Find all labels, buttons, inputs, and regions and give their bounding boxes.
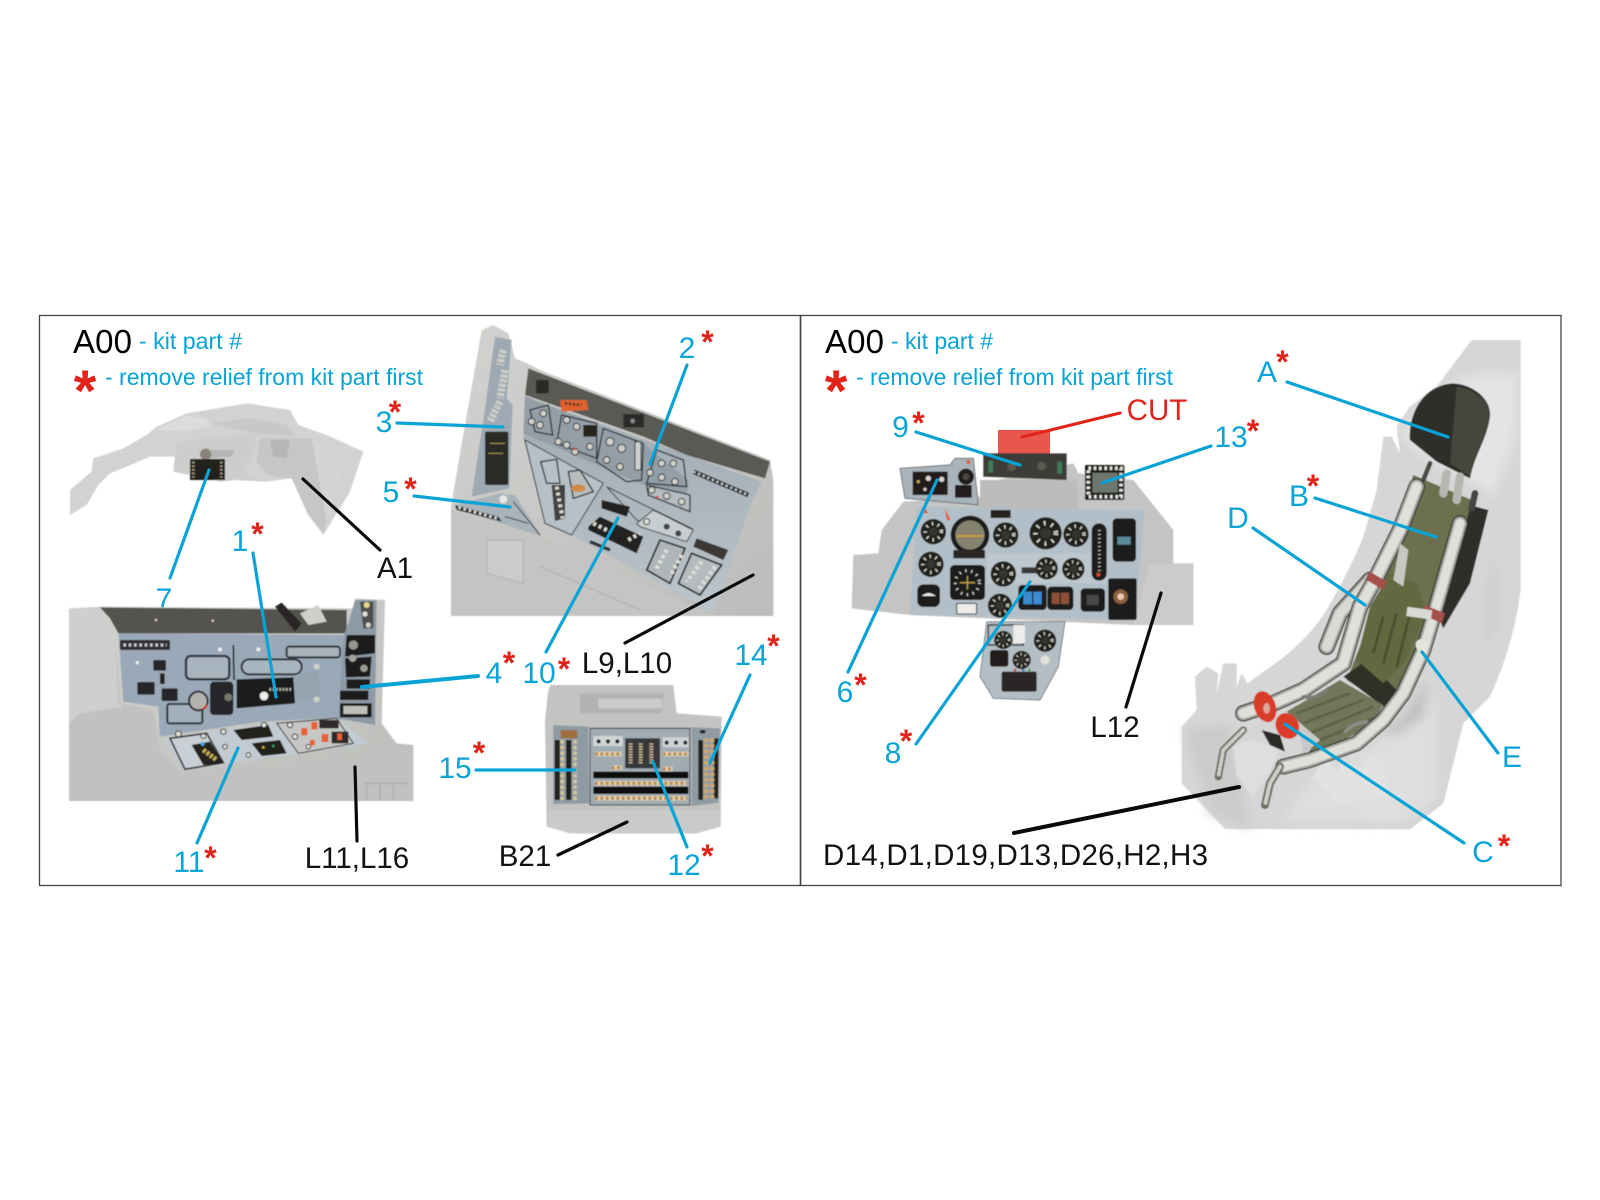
callout 5: 5 <box>383 476 399 509</box>
callout 11: 11 <box>173 846 205 879</box>
attitude indicator <box>951 516 989 554</box>
callout C <box>1285 724 1511 869</box>
callout 9: 9 <box>892 411 909 444</box>
heading: legend right: - remove relief from kit part first <box>856 364 1174 390</box>
heading: legend right: - kit part # <box>891 328 993 354</box>
callout 15: 15 <box>438 752 472 785</box>
photo: canopy frame part A1 <box>70 403 363 535</box>
callout D: D <box>1227 502 1249 535</box>
callout 9: * <box>912 405 925 441</box>
callout 12: * <box>701 838 714 874</box>
centre panel <box>553 725 589 804</box>
heading: legend left: - kit part # <box>139 328 242 354</box>
callout L12: L12 <box>1090 711 1140 744</box>
callout E: E <box>1502 741 1522 774</box>
heading: legend right <box>825 323 1174 424</box>
callout 10: 10 <box>522 657 556 690</box>
side panel <box>472 337 513 497</box>
frame: right panel <box>800 316 1561 886</box>
callout 2: * <box>701 324 714 360</box>
callout 15: * <box>473 735 486 771</box>
seat cushion <box>1287 680 1383 760</box>
line: panel divider <box>800 315 802 885</box>
panel: right <box>800 316 1561 886</box>
lower slanted panel <box>163 718 368 770</box>
callout C: * <box>1498 828 1511 864</box>
callout L12 <box>1090 593 1161 744</box>
harness <box>1218 463 1475 805</box>
callout B21 <box>499 822 627 873</box>
heading: legend right: * <box>825 359 848 424</box>
photo: ejection seat <box>1182 340 1521 829</box>
callout L11,L16: L11,L16 <box>305 842 409 875</box>
heading: legend right: A00 <box>825 323 884 360</box>
callout B: * <box>1307 468 1320 504</box>
callout 4 <box>362 645 516 690</box>
top left plate <box>900 458 978 505</box>
callout 11: * <box>204 840 217 876</box>
square gauge <box>950 565 985 600</box>
label: 7 behind console photo <box>156 470 209 616</box>
photo: instrument panel L12 <box>852 453 1193 700</box>
callout D14 group <box>823 787 1239 872</box>
callout 14: * <box>767 628 780 664</box>
callout 3: * <box>389 394 402 430</box>
callouts: left panel <box>173 324 780 882</box>
heading: legend left: A00 <box>73 323 132 360</box>
right panel <box>338 600 377 725</box>
callout 2 <box>650 324 714 464</box>
callout 15 <box>438 735 575 785</box>
panel: left <box>40 315 800 886</box>
callout 6: 6 <box>837 676 853 709</box>
callout 1 <box>232 516 276 697</box>
callout 6: * <box>854 667 867 703</box>
callout 13 <box>1102 413 1260 483</box>
callout 2: 2 <box>679 332 695 365</box>
lower panels <box>525 440 603 535</box>
callout 3 <box>376 394 503 439</box>
octagon gauge <box>917 584 940 607</box>
callout A <box>1257 344 1448 437</box>
seat back <box>1430 503 1488 628</box>
photo: console L11,L16 <box>69 598 413 801</box>
soft shading <box>1183 373 1517 829</box>
callout 8: * <box>900 723 913 759</box>
callout D <box>1227 502 1365 605</box>
photo: radio console B21 <box>545 685 722 833</box>
callout D14 group: D14,D1,D19,D13,D26,H2,H3 <box>823 839 1208 872</box>
callout B <box>1289 468 1436 537</box>
callout CUT: CUT <box>1127 394 1187 427</box>
callout B: B <box>1289 480 1309 513</box>
callout 10: * <box>558 651 571 687</box>
callout 12 <box>653 762 714 882</box>
callout L9,L10: L9,L10 <box>582 647 672 680</box>
main panel <box>523 397 762 613</box>
lower plate <box>980 622 1065 700</box>
callout L9,L10 <box>582 575 753 680</box>
sub panels <box>530 405 690 512</box>
tall gauge <box>1092 523 1107 581</box>
callout 1: 1 <box>232 525 248 558</box>
callout 8 <box>885 582 1030 770</box>
callout 5 <box>383 471 510 509</box>
callout 8: 8 <box>885 737 901 770</box>
small triangle panel <box>455 493 542 537</box>
callout 1: * <box>251 516 264 552</box>
callout 13: * <box>1247 413 1260 449</box>
callout C: C <box>1472 836 1494 869</box>
top box <box>983 453 1067 480</box>
icon: red cut area <box>998 430 1050 456</box>
photo: console L9,L10 <box>451 325 773 616</box>
callout A: * <box>1276 344 1289 380</box>
heading: legend left: * <box>74 359 97 424</box>
heading: legend left: - remove relief from kit part first <box>105 364 424 390</box>
callout 11 <box>173 748 238 879</box>
blue panel <box>118 633 343 737</box>
callout A1 <box>303 479 413 585</box>
callout A1: A1 <box>377 552 413 585</box>
callout 3: 3 <box>376 406 392 439</box>
callout B21: B21 <box>499 840 551 873</box>
headrest <box>1410 383 1490 478</box>
frame: left panel <box>40 316 800 886</box>
ejection handle <box>1250 688 1304 743</box>
heading: legend left <box>73 323 424 424</box>
callout 10 <box>522 518 618 690</box>
main plate <box>910 507 1145 620</box>
small square <box>1085 465 1124 500</box>
callout 4: * <box>503 645 516 681</box>
knob <box>275 603 302 632</box>
instrument dials <box>921 519 946 544</box>
callout E <box>1422 652 1522 774</box>
callout 12: 12 <box>667 849 701 882</box>
callout 13: 13 <box>1214 421 1248 454</box>
icon: small PE part <box>190 449 225 480</box>
callouts: right panel <box>823 344 1522 872</box>
callout 9 <box>892 405 1020 465</box>
callout 4: 4 <box>486 657 502 690</box>
label: 7 behind console photo: 7 <box>156 583 172 616</box>
callout 5: * <box>404 471 417 507</box>
callout 14 <box>710 628 780 763</box>
callout 14: 14 <box>734 639 768 672</box>
callout CUT <box>1022 394 1187 437</box>
callout A: A <box>1257 356 1277 389</box>
callout 6 <box>837 480 937 709</box>
callout L11,L16 <box>305 767 409 875</box>
